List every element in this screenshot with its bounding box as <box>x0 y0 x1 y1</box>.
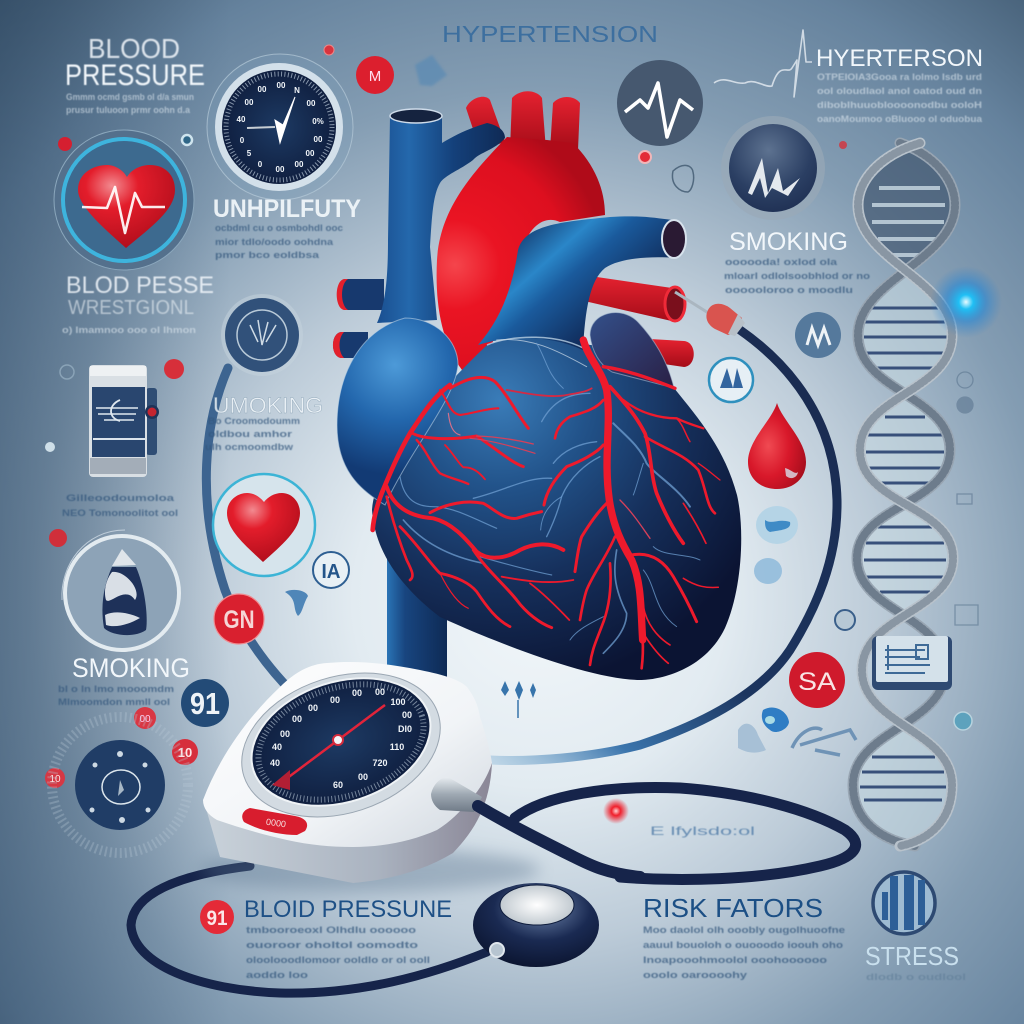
text block: smoking lower <box>58 684 174 707</box>
blurred caption inside loop: E lfylsdo:ol <box>650 824 755 838</box>
text block: blood pressure: tmbooroeoxl Olhdlu oooooo <box>246 925 417 935</box>
gauge face: 100 <box>390 697 406 707</box>
badge: red 91: 91 <box>206 907 228 930</box>
text block: unhealthy: ocbdml cu o osmbohdl ooc <box>215 223 343 233</box>
heading: blood pressure restgional: BLOD PESSE <box>66 272 214 299</box>
gauge face: 60 <box>333 780 343 790</box>
superior vena cava <box>377 109 505 323</box>
text block: smoking right: oooooloroo o moodlu <box>725 285 853 295</box>
badge: dark 91: 91 <box>190 686 220 721</box>
icon: dark dial lower left <box>52 717 188 853</box>
badge: red GN: GN <box>224 606 254 634</box>
icon: small cyan dot <box>182 135 192 145</box>
red button: 0000 <box>265 817 287 829</box>
text block: risk factors: Moo daolol olh ooobly ougolhuoofne <box>643 925 845 935</box>
icon: blue M blob <box>795 312 841 358</box>
coronary veins light blue <box>400 339 700 653</box>
icon: red heart in cyan ring <box>213 474 315 576</box>
icon: dark round badge <box>221 294 303 376</box>
icon: smoking ring <box>62 530 179 650</box>
gauge face: 40 <box>272 742 282 752</box>
helix strands <box>853 143 955 846</box>
text block: smoking right: mloarl odlolsoobhlod or no <box>724 271 871 281</box>
text block: smoking upper: ulh ocmoomdbw <box>205 442 294 452</box>
heading: blood pressure: BLOID PRESSUNE <box>244 896 452 923</box>
icon: red badge top <box>356 56 394 94</box>
text block: blood pressure <box>246 925 430 980</box>
right vessels <box>580 276 694 367</box>
badge: SA red <box>789 652 845 708</box>
connector <box>675 292 745 336</box>
gauge: top left dial: 00 <box>314 135 323 144</box>
gauge: top left dial: 0% <box>312 117 324 126</box>
pulmonary trunk <box>478 216 686 352</box>
helix rungs <box>860 308 948 800</box>
icon: blue blob top <box>415 55 447 86</box>
chest piece <box>473 883 599 967</box>
icon: red star badge <box>49 529 67 547</box>
gauge: top left dial: 00 <box>245 98 254 107</box>
icon: small red dot top left <box>324 45 334 55</box>
badge: red 10: 10 <box>178 745 192 760</box>
panel: small report screen <box>872 636 952 690</box>
gauge face: 00 <box>292 714 302 724</box>
gauge face: 00 <box>280 729 290 739</box>
icon: small badge near DNA <box>835 610 855 630</box>
icon: red dot center <box>639 151 651 163</box>
gauge: top left dial: 00 <box>307 99 316 108</box>
DNA helix <box>853 143 955 846</box>
heading: risk factors: RISK FATORS <box>643 893 823 923</box>
gauge: top left dial: 40 <box>237 115 246 124</box>
text block: unhealthy: mior tdlo/oodo oohdna <box>215 237 334 247</box>
heading: blood pressure restgional: o) lmamnoo ooo ol lhmon <box>62 325 196 335</box>
right atrium <box>337 318 458 505</box>
upper right chamber <box>590 313 674 388</box>
heart illustration <box>337 91 741 680</box>
ECG trace top right <box>714 30 812 97</box>
aorta <box>437 137 605 370</box>
gauge: top left dial: 0 <box>240 136 245 145</box>
heading: smoking right: SMOKING <box>729 228 848 256</box>
icon: blood drop <box>748 403 806 489</box>
gauge: top left dial: 5 <box>247 149 252 158</box>
icon: heart with ECG in ring <box>54 130 194 270</box>
blood pressure monitor <box>200 649 640 892</box>
heading: smoking upper: UMOKING <box>213 393 323 418</box>
left red pipes <box>333 279 384 358</box>
text block: smoking upper <box>205 416 300 452</box>
text block: hypertension right: diboblhuuobloooonodbu ooloH <box>817 100 982 110</box>
main ventricle <box>372 336 741 680</box>
badge: red left 10: 10 <box>49 774 61 785</box>
small ghost icons right <box>955 372 978 625</box>
stethoscope lower tube <box>131 866 487 993</box>
icon: stress bars circle <box>873 872 935 934</box>
gauge face: 00 <box>308 703 318 713</box>
text block: smoking lower: Mlmoomdon mmll ool <box>58 697 170 707</box>
text block: hypertension right: ool oloudlaol anol oatod oud dn <box>817 86 982 96</box>
icon: blue swirl <box>285 590 308 616</box>
heading: blood pressure restgional: WRESTGIONL <box>68 297 194 319</box>
red button <box>242 808 307 835</box>
hose loop behind monitor <box>515 787 856 879</box>
monitor drop dots <box>501 681 536 718</box>
lower vena cava <box>387 480 447 680</box>
gauge face <box>223 649 459 841</box>
icon: red glowing dot <box>58 137 72 151</box>
body text: Gmmm ocmd gsmb ol d/a smun <box>66 92 194 102</box>
gauge face: 40 <box>270 758 280 768</box>
text block: monitor caption: Gilleoodoumoloa <box>66 493 175 503</box>
text block: unhealthy: pmor bco eoldbsa <box>215 250 320 260</box>
gauge face: 00 <box>352 688 362 698</box>
heading: stress: STRESS <box>865 941 959 971</box>
coronary veins red <box>373 340 720 668</box>
left blue arc <box>206 368 295 695</box>
icon: small orb <box>754 558 782 584</box>
gauge face: 00 <box>358 772 368 782</box>
gauge: top left dial <box>207 54 353 200</box>
icon: cuff monitor <box>89 365 159 477</box>
gauge face: 00 <box>330 695 340 705</box>
badge: SA red: SA <box>798 668 836 696</box>
gauge: top left dial: 0 <box>258 160 263 169</box>
icon: AV circle <box>721 116 825 220</box>
badge: red GN <box>214 594 264 644</box>
gauge: top left dial: 00 <box>306 149 315 158</box>
badge: red left 10 <box>45 768 65 788</box>
text block: blood pressure: aoddo loo <box>246 970 309 980</box>
text block: hypertension right: OTPEIOIA3Gooa ra lolmo Isdb urd <box>817 72 982 82</box>
gauge face: DI0 <box>398 724 412 734</box>
icon: red small dot right <box>839 141 847 149</box>
gauge: top left dial: 00 <box>295 160 304 169</box>
text block: unhealthy <box>215 223 343 260</box>
aortic branches <box>466 91 580 150</box>
text block: smoking lower: bl o ln lmo mooomdm <box>58 684 174 694</box>
heading: blood pressure restgional <box>62 272 214 335</box>
text block: blood pressure: ouoroor oholtol oomodto <box>246 940 419 950</box>
gauge face: 110 <box>390 742 404 752</box>
icon: blue shield cluster <box>738 708 856 755</box>
text block: smoking right <box>724 257 871 295</box>
heading: pressure: PRESSURE <box>65 59 205 92</box>
icon: IA ring badge: IA <box>322 561 340 583</box>
text block: hypertension right: oanoMoumoo oBluooo ol oduobua <box>817 114 983 124</box>
icon: red small badge <box>164 359 184 379</box>
gauge: top left dial: 00 <box>276 165 285 174</box>
text block: smoking upper: oldbou amhor <box>208 429 293 439</box>
badge: dark 91 <box>181 679 229 727</box>
text block: blood pressure: oloolooodlomoor ooldlo or ol ooll <box>246 955 430 965</box>
badge: red 91 <box>200 900 234 934</box>
badge: red small top <box>134 707 156 729</box>
monitor shadow <box>200 848 540 892</box>
monitor top <box>203 662 492 847</box>
monitor side <box>205 763 492 883</box>
small marks near monitor <box>45 365 74 452</box>
red glowing dot on hose <box>603 798 629 824</box>
text block: risk factors <box>643 925 845 980</box>
gauge face: 00 <box>375 687 385 697</box>
text block: risk factors: Inoapooohmoolol ooohoooooo <box>643 955 828 965</box>
hose front <box>478 806 640 877</box>
body text line: prusur tuluoon prmr oohn d.a <box>66 105 191 115</box>
text: stress caption: dlodb o oudlool <box>866 972 966 982</box>
icon: light blue orb <box>756 506 798 544</box>
title: hypertension: HYPERTENSION <box>442 21 658 47</box>
metal connector <box>431 777 482 812</box>
text block: risk factors: ooolo oaroooohy <box>643 970 747 980</box>
icon: M ring <box>709 358 753 402</box>
main stethoscope tube arc <box>490 330 837 760</box>
gauge: top left dial: 00 <box>258 85 267 94</box>
helix inner fill <box>853 145 955 846</box>
main trunk <box>583 340 643 640</box>
glow: blue light <box>930 266 1002 338</box>
heading: hypertension right: HYERTERSON <box>816 45 983 72</box>
text block: hypertension right <box>817 72 983 124</box>
icon: red badge top: M <box>369 68 381 85</box>
heading: unhealthy: UNHPILFUTY <box>213 195 361 223</box>
text block: smoking upper: Bo Croomodoumm <box>208 416 300 426</box>
icon: outlined glyph <box>672 165 694 192</box>
text block: monitor caption: NEO Tomonoolitot ool <box>62 508 178 518</box>
panel: blood pressure heading <box>65 33 205 115</box>
gauge face: 00 <box>402 710 412 720</box>
text block: risk factors: aauul bouoloh o ouooodo ioouh oho <box>643 940 844 950</box>
text block: smoking right: oooooda! oxlod ola <box>725 257 838 267</box>
badge: red small top: 00 <box>139 714 151 725</box>
icon: IA ring badge <box>313 552 349 588</box>
icon: top ECG circle <box>617 60 703 146</box>
badge: red 10 <box>172 739 198 765</box>
heading: smoking lower: SMOKING <box>72 653 190 683</box>
heading: blood: BLOOD <box>88 33 180 64</box>
gauge: top left dial: 00 <box>277 81 286 90</box>
icon: teal dot <box>954 712 972 730</box>
left trunk <box>373 385 450 530</box>
gauge face: 720 <box>372 758 388 768</box>
gauge: top left dial: N <box>294 86 300 95</box>
text block: monitor caption <box>62 493 178 518</box>
